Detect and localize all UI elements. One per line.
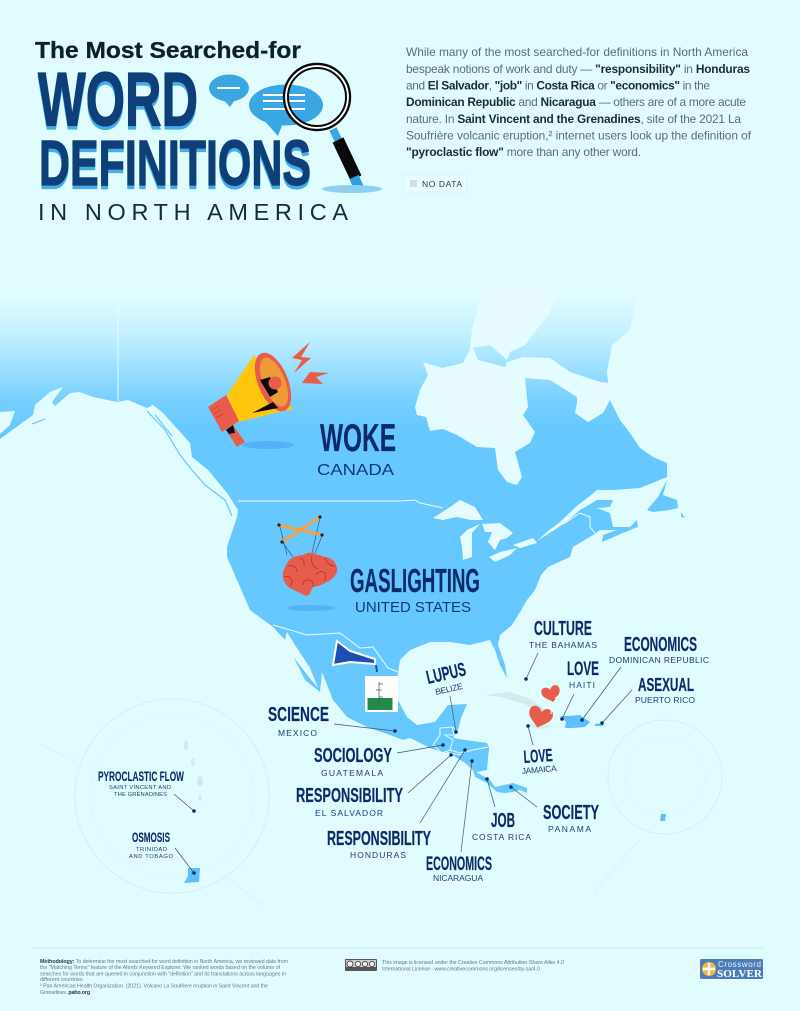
label: Asexual, Puerto Rico: ASEXUAL (638, 675, 694, 695)
coast islands (0, 411, 15, 434)
intro paragraph: While many of the most searched-for definitions in North America (406, 45, 748, 59)
intro paragraph: Soufrière volcanic eruption,² internet users look up the definition of (406, 128, 752, 142)
legend: no data: NO DATA (422, 179, 462, 189)
Baja California (285, 632, 318, 688)
intro paragraph: "pyroclastic flow" more than any other word. (406, 145, 641, 159)
title WORD: WORD (38, 58, 198, 142)
label: Love, Haiti: LOVE (567, 659, 599, 680)
icon: flask and beaker (333, 641, 398, 712)
Newfoundland (647, 480, 685, 518)
label: Lupus, Belize: LUPUS (424, 659, 468, 689)
label: Pyroclastic Flow, Saint Vincent and the Grenadines: SAINT VINCENT AND (109, 785, 171, 791)
map of North America (0, 280, 685, 793)
methodology text: Grenadines. paho.org (40, 990, 90, 996)
logo: Crossword Solver: Crossword (718, 960, 761, 969)
methodology text: Methodology: To determine the most searched-for word definition in North America, we reviewed data from (40, 959, 288, 965)
label: Responsibility, El Salvador (296, 753, 453, 818)
title WORD (38, 58, 198, 146)
label: Love, Haiti (560, 659, 599, 721)
Great Lakes and St Lawrence (433, 500, 483, 520)
label: Economics, Dominican Republic: DOMINICAN REPUBLIC (609, 655, 709, 665)
methodology text (40, 959, 288, 996)
label: Science, Mexico (268, 704, 397, 738)
intro paragraph: bespeak notions of work and duty — "responsibility" in Honduras (406, 62, 750, 76)
label: Asexual, Puerto Rico (600, 675, 695, 725)
license text (382, 960, 564, 972)
intro paragraph (406, 45, 752, 159)
label: Economics, Nicaragua: NICARAGUA (433, 873, 483, 883)
label: Love, Jamaica (521, 724, 557, 776)
label: Sociology, Guatemala (314, 743, 445, 778)
label: Sociology, Guatemala: SOCIOLOGY (314, 745, 392, 767)
license badge (345, 959, 377, 971)
label: Responsibility, El Salvador: RESPONSIBILITY (296, 785, 403, 807)
logo: Crossword Solver (700, 959, 763, 980)
label: Osmosis, Trinidad and Tobago: OSMOSIS (132, 830, 170, 845)
label: Pyroclastic Flow, Saint Vincent and the Grenadines (98, 769, 196, 813)
title DEFINITIONS: DEFINITIONS (39, 130, 311, 202)
label: Osmosis, Trinidad and Tobago: AND TOBAGO (129, 854, 173, 860)
label: Culture, The Bahamas (524, 618, 597, 681)
footer divider (32, 947, 763, 949)
label: Society, Panama: PANAMA (548, 824, 591, 834)
label: Canada (317, 417, 396, 479)
inset map circles (40, 699, 722, 905)
label: Responsibility, Honduras (327, 748, 467, 860)
label: Economics, Nicaragua (426, 759, 492, 883)
label: Science, Mexico: SCIENCE (268, 704, 329, 726)
borders (118, 300, 488, 755)
methodology text: ² Pan American Health Organization. (2021). Volcano La Soufriere eruption in Saint Vincent and the (40, 984, 268, 990)
label: Responsibility, Honduras: HONDURAS (350, 850, 406, 860)
label: Canada: CANADA (317, 462, 394, 479)
label: Job, Costa Rica: JOB (491, 810, 515, 832)
label: United States: GASLIGHTING (350, 562, 480, 599)
intro paragraph: nature. In Saint Vincent and the Grenadines, site of the 2021 La (406, 112, 741, 126)
label: Culture, The Bahamas: CULTURE (534, 618, 592, 640)
label: Asexual, Puerto Rico: PUERTO RICO (635, 695, 695, 705)
methodology text: searches for words that are queried in conjunction with "definition" and its translations across languages in (40, 972, 286, 978)
label: Love, Haiti: HAITI (569, 680, 595, 690)
label: Love, Jamaica: JAMAICA (521, 763, 557, 776)
label: Job, Costa Rica (472, 777, 531, 842)
icon: megaphone (208, 342, 329, 449)
label: Lupus, Belize (424, 659, 468, 734)
methodology text: the "Matching Terms" feature of the Ahrefs Keyword Explorer. We ranked words based on the volume of (40, 965, 280, 971)
label: Love, Jamaica: LOVE (523, 745, 553, 767)
license text: This image is licensed under the Creative Commons Attribution-Share Alike 4.0 (382, 960, 564, 966)
icon: puppet brain (277, 515, 337, 611)
label: Sociology, Guatemala: GUATEMALA (321, 768, 383, 778)
label: Economics, Dominican Republic (580, 634, 709, 722)
label: Osmosis, Trinidad and Tobago (129, 830, 200, 883)
license text: International License - www.creativecommons.org/licenses/by-sa/4.0 (382, 966, 540, 972)
label: Job, Costa Rica: COSTA RICA (472, 832, 531, 842)
icon: speech bubbles and magnifier (209, 64, 382, 193)
title line 3: IN NORTH AMERICA (38, 199, 348, 225)
title WORD: WORD (38, 61, 198, 146)
label: Society, Panama: SOCIETY (543, 802, 599, 824)
label: Economics, Nicaragua: ECONOMICS (426, 854, 492, 875)
label: Canada: WOKE (320, 417, 396, 460)
Hudson Bay and arctic waters (415, 345, 610, 485)
title line 1: The Most Searched-for (35, 37, 301, 63)
label: United States: UNITED STATES (355, 599, 471, 616)
label: United States (350, 562, 480, 616)
label: Culture, The Bahamas: THE BAHAMAS (529, 640, 597, 650)
methodology text: different countries. (40, 977, 84, 983)
title DEFINITIONS (39, 127, 311, 202)
label: Responsibility, Honduras: RESPONSIBILITY (327, 828, 431, 850)
intro paragraph: and El Salvador, "job" in Costa Rica or "economics" in the (406, 78, 710, 92)
label: Osmosis, Trinidad and Tobago: TRINIDAD (136, 847, 167, 853)
label: Responsibility, El Salvador: EL SALVADOR (315, 808, 383, 818)
title (35, 37, 348, 225)
logo: Crossword Solver: SOLVER (717, 969, 762, 980)
label: Pyroclastic Flow, Saint Vincent and the Grenadines: PYROCLASTIC FLOW (98, 769, 184, 784)
label: Economics, Dominican Republic: ECONOMICS (624, 634, 697, 656)
icon: hearts (526, 684, 562, 731)
title DEFINITIONS: DEFINITIONS (39, 127, 311, 199)
legend: no data (404, 175, 467, 192)
label: Science, Mexico: MEXICO (278, 728, 317, 738)
Caribbean islands (485, 692, 550, 716)
label: Society, Panama (509, 785, 599, 834)
intro paragraph: Dominican Republic and Nicaragua — others are of a more acute (406, 95, 746, 109)
label: Pyroclastic Flow, Saint Vincent and the Grenadines: THE GRENADINES (114, 792, 167, 798)
label: Lupus, Belize: BELIZE (434, 681, 464, 697)
